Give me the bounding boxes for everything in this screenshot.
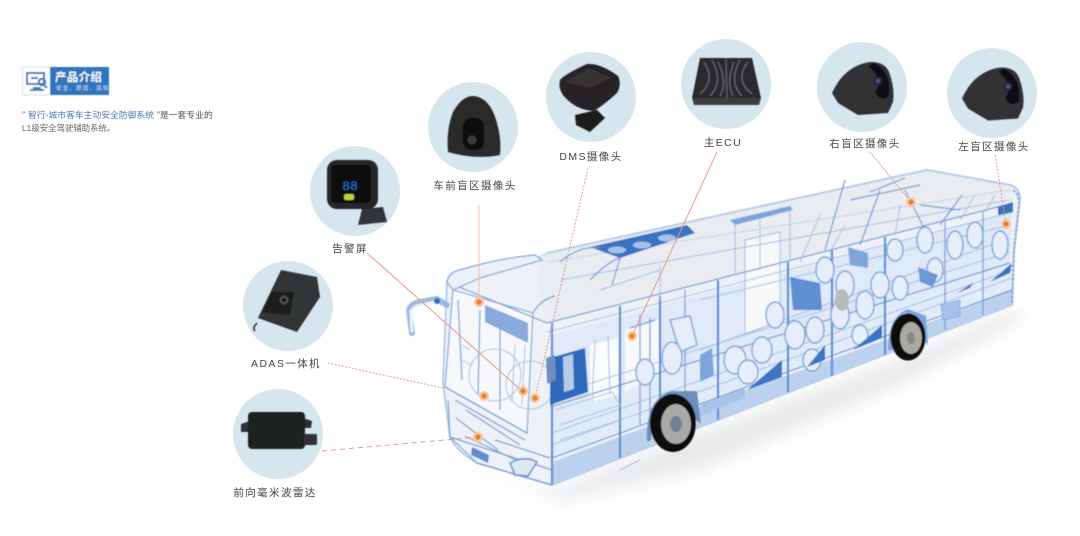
icon: side camera left	[962, 68, 1024, 120]
leader: radar	[322, 437, 478, 451]
bus body shell	[443, 170, 1020, 485]
leader lines	[322, 152, 1006, 451]
callout: front millimeter wave radar	[233, 389, 323, 499]
ground shadow	[470, 310, 1025, 500]
roof vent	[730, 206, 793, 225]
bus wireframe	[409, 170, 1020, 485]
callout: left blind area camera: 左盲区摄像头	[958, 140, 1030, 153]
door interior	[555, 335, 640, 470]
section heading: product introduction	[22, 67, 110, 95]
lower side skirt	[552, 290, 1012, 485]
icon: warning screen: 88	[342, 179, 358, 194]
seats	[636, 222, 1008, 385]
intro paragraph: L1级安全驾驶辅助系统。	[22, 123, 115, 133]
front windshield	[445, 290, 533, 433]
icon: monitor with magnifier	[27, 73, 47, 90]
driver window	[550, 348, 588, 405]
callout: front millimeter wave radar: 前向毫米波雷达	[233, 486, 317, 499]
leader: warning screen	[367, 253, 521, 390]
front wheel	[647, 391, 701, 452]
leader: front blind camera	[478, 205, 480, 302]
leader: DMS camera	[535, 168, 588, 398]
icon: radar module	[241, 412, 317, 449]
callout: warning screen	[310, 146, 400, 255]
section heading: product introduction: 安全、舒适、高效	[56, 84, 110, 92]
sun visor	[485, 305, 528, 343]
blue floor triangles	[747, 360, 782, 390]
leader: left blind camera	[995, 155, 1006, 224]
icon: DMS camera	[559, 64, 620, 132]
icon: dome camera front	[448, 96, 500, 157]
front roof cap	[447, 255, 542, 290]
callout: right blind area camera: 右盲区摄像头	[829, 137, 901, 150]
intro paragraph	[22, 109, 213, 133]
intro paragraph: ” 智行-城市客车主动安全防御系统 ”是一套专业的	[22, 109, 213, 120]
callout: ADAS unit: ADAS一体机	[251, 357, 321, 370]
icon: side camera right	[832, 62, 894, 115]
roof hoops	[560, 248, 620, 285]
front bumper and grille	[448, 400, 552, 485]
leader: right blind camera	[870, 152, 911, 202]
blue interior panels	[790, 277, 822, 310]
leader: ADAS unit	[328, 363, 443, 388]
rear blue box	[998, 202, 1013, 215]
section heading: product introduction: 产品介绍	[55, 70, 102, 84]
rails	[547, 203, 1013, 323]
orange sensor markers	[473, 197, 1011, 442]
window lights	[590, 338, 618, 402]
callout: main ECU	[681, 39, 771, 149]
icon: ECU heatsink box	[692, 58, 761, 105]
callout: DMS camera: DMS摄像头	[559, 150, 623, 163]
callout: ADAS unit	[243, 261, 333, 370]
callout: DMS camera	[546, 52, 636, 163]
callout: warning screen: 告警屏	[332, 242, 368, 255]
callout: main ECU: 主ECU	[704, 137, 742, 149]
callout: front blind area camera	[428, 82, 518, 192]
roof AC unit	[590, 225, 695, 258]
interior tint	[552, 212, 1012, 407]
callout: front blind area camera: 车前盲区摄像头	[433, 179, 517, 192]
callout: left blind area camera	[947, 48, 1037, 153]
roof panel	[539, 170, 1013, 323]
pillars	[551, 323, 553, 485]
callout: right blind area camera	[817, 42, 907, 150]
rear wheel	[888, 309, 928, 360]
leader: main ECU	[632, 152, 717, 336]
icon: ADAS all-in-one unit	[254, 270, 320, 332]
side mirror	[409, 298, 447, 333]
